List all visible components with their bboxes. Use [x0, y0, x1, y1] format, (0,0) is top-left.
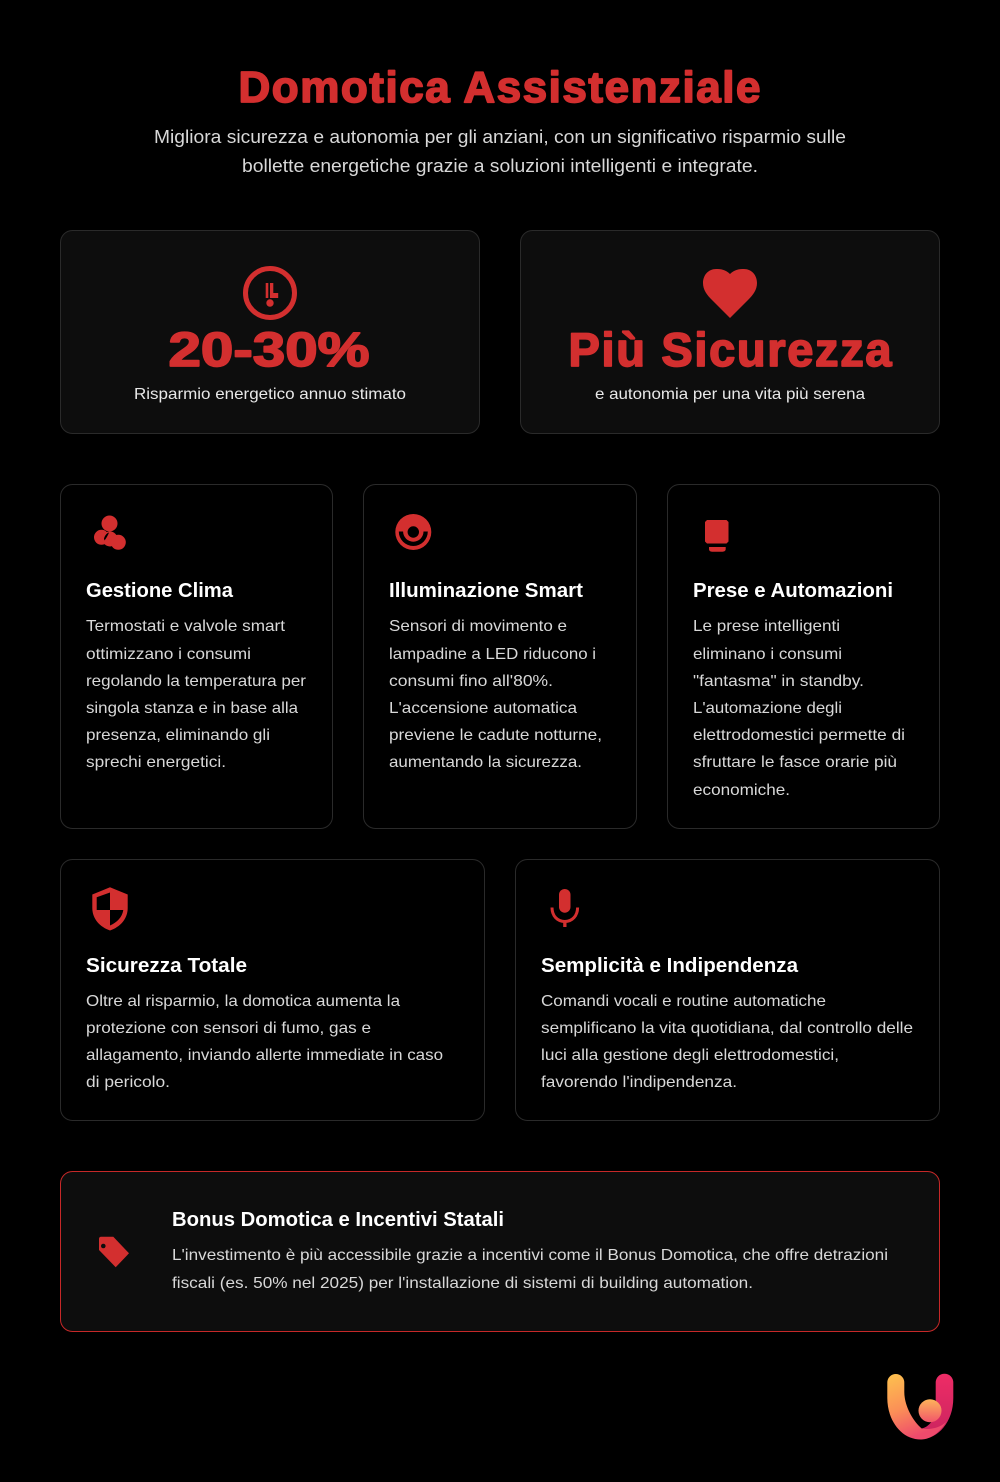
body text: sfruttare le fasce orarie più — [693, 754, 897, 771]
icon: smart plug — [705, 520, 728, 552]
icon: price tag — [99, 1237, 129, 1267]
body text: singola stanza e in base alla — [86, 700, 298, 717]
body text: Sensori di movimento e — [389, 618, 567, 635]
heading: Gestione Clima — [86, 580, 234, 602]
stat label: e autonomia per una vita più serena — [595, 386, 865, 403]
panel: bonus and incentives — [60, 1172, 940, 1332]
body text: luci alla gestione degli elettrodomestici, — [541, 1047, 839, 1064]
body text: L'automazione degli — [693, 700, 842, 717]
body text: Oltre al risparmio, la domotica aumenta la — [86, 993, 400, 1010]
body text: protezione con sensori di fumo, gas e — [86, 1020, 371, 1037]
body text — [172, 1247, 888, 1292]
body text — [86, 618, 307, 771]
body text — [86, 993, 443, 1091]
body text: di pericolo. — [86, 1074, 170, 1091]
panel: plugs and automation — [668, 484, 940, 828]
body text — [389, 618, 602, 771]
heading: Bonus Domotica e Incentivi Statali — [172, 1209, 504, 1231]
body text: aumentando la sicurezza. — [389, 754, 582, 771]
body text: economiche. — [693, 782, 790, 799]
title: Domotica Assistenziale — [238, 63, 760, 112]
body text: allagamento, inviando allerte immediate in caso — [86, 1047, 443, 1064]
subtitle — [154, 127, 846, 176]
body text: previene le cadute notturne, — [389, 727, 602, 744]
body text: sprechi energetici. — [86, 754, 226, 771]
body text: ottimizzano i consumi — [86, 646, 251, 663]
icon: alert clock — [246, 268, 294, 318]
body text: semplificano la vita quotidiana, dal controllo delle — [541, 1020, 913, 1037]
icon: shield — [92, 887, 128, 930]
panel: climate management — [60, 484, 332, 828]
subtitle: bollette energetiche grazie a soluzioni intelligenti e integrate. — [242, 156, 758, 176]
body text: Termostati e valvole smart — [86, 618, 286, 635]
heading: Prese e Automazioni — [693, 580, 893, 602]
panel: simplicity and independence — [516, 860, 940, 1120]
body text: L'accensione automatica — [389, 700, 577, 717]
subtitle: Migliora sicurezza e autonomia per gli anziani, con un significativo risparmio sulle — [154, 127, 846, 147]
body text — [693, 618, 905, 799]
body text: regolando la temperatura per — [86, 673, 307, 690]
panel: energy saving stat — [60, 230, 480, 434]
icon: heart — [703, 269, 757, 318]
header — [154, 63, 846, 176]
body text: favorendo l'indipendenza. — [541, 1074, 737, 1091]
icon: microphone — [552, 889, 578, 927]
body text: consumi fino all'80%. — [389, 673, 553, 690]
body text: elettrodomestici permette di — [693, 727, 905, 744]
body text — [541, 993, 913, 1091]
body text: "fantasma" in standby. — [693, 673, 864, 690]
body text: fiscali (es. 50% nel 2025) per l'installazione di sistemi di building automation. — [172, 1275, 753, 1292]
icon: light sensor — [395, 514, 431, 550]
panel: total security — [60, 860, 484, 1120]
panel: smart lighting — [364, 484, 636, 828]
icon: climate circles — [94, 516, 126, 550]
body text: eliminano i consumi — [693, 646, 842, 663]
icon: brand logo — [887, 1374, 953, 1440]
body text: presenza, eliminando gli — [86, 727, 270, 744]
body text: L'investimento è più accessibile grazie a incentivi come il Bonus Domotica, che offre detrazioni — [172, 1247, 888, 1264]
body text: Comandi vocali e routine automatiche — [541, 993, 826, 1010]
stat value: 20-30% — [168, 324, 370, 377]
body text: lampadine a LED riducono i — [389, 646, 596, 663]
heading: Illuminazione Smart — [389, 580, 583, 602]
heading: Semplicità e Indipendenza — [541, 955, 799, 977]
body text: Le prese intelligenti — [693, 618, 840, 635]
heading: Sicurezza Totale — [86, 955, 247, 977]
stat value: Più Sicurezza — [568, 323, 892, 376]
panel: safety stat — [520, 230, 940, 434]
stat label: Risparmio energetico annuo stimato — [134, 386, 406, 403]
